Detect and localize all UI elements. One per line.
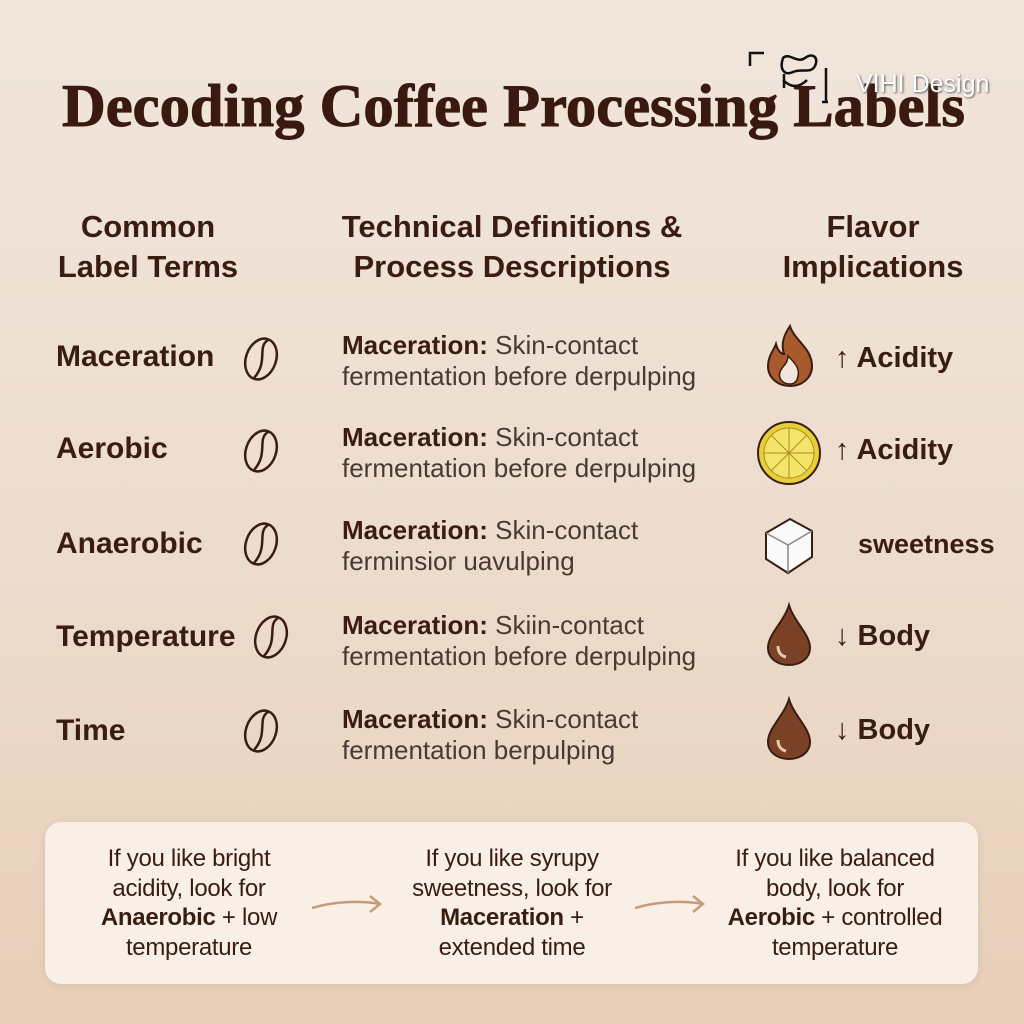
icon: bean — [244, 337, 278, 381]
definition: ferminsior uavulping — [342, 546, 575, 576]
tip: body — [728, 845, 942, 960]
term: Temperature — [56, 620, 236, 653]
icon: drop — [767, 602, 811, 666]
definition — [342, 515, 638, 576]
row: Maceration — [56, 324, 953, 391]
tip: acidity: temperature — [126, 934, 252, 960]
definition: Maceration: Skiin-contact — [342, 610, 644, 640]
logo watermark: VIHI Design — [856, 70, 989, 98]
icon: flame — [767, 324, 813, 387]
tip: body: temperature — [772, 934, 898, 960]
term: Anaerobic — [56, 527, 203, 560]
definition — [342, 704, 638, 765]
definition: Maceration: Skin-contact — [342, 330, 638, 360]
definition — [342, 330, 696, 391]
tip: sweetness: sweetness, look for — [412, 874, 612, 902]
header: definitions — [342, 209, 682, 284]
icon: bean — [244, 709, 278, 753]
tip: body: Aerobic + controlled — [728, 904, 942, 931]
row: Temperature — [56, 602, 930, 671]
tip: body: If you like balanced — [735, 845, 935, 872]
row: Time — [56, 696, 930, 765]
definition: fermentation before derpulping — [342, 641, 696, 671]
definition — [342, 610, 696, 671]
flavor: ↓ Body — [835, 714, 930, 746]
flavor: ↑ Acidity — [835, 342, 953, 374]
flavor: ↓ Body — [835, 620, 930, 652]
term: Time — [56, 714, 125, 747]
tip: acidity: Anaerobic + low — [101, 904, 277, 931]
row: Aerobic — [56, 421, 953, 485]
definition: fermentation berpulping — [342, 735, 615, 765]
flavor: sweetness — [858, 529, 995, 559]
definition — [342, 422, 696, 483]
tip: sweetness — [412, 845, 612, 960]
definition: fermentation before derpulping — [342, 453, 696, 483]
row: Anaerobic — [56, 515, 995, 576]
icon: bean — [254, 615, 288, 659]
term: Aerobic — [56, 432, 168, 465]
definition: Maceration: Skin-contact — [342, 704, 638, 734]
header: definitions: Technical Definitions & — [342, 209, 682, 244]
arrow — [312, 895, 382, 913]
definition: fermentation before derpulping — [342, 361, 696, 391]
header: terms: Common — [81, 209, 215, 244]
header: flavor: Implications — [783, 249, 963, 284]
tip: sweetness: extended time — [439, 934, 585, 960]
tip: sweetness: If you like syrupy — [425, 845, 599, 872]
logo watermark — [748, 52, 990, 104]
tip: acidity — [101, 845, 278, 960]
icon: drop — [767, 696, 811, 760]
header: terms: Label Terms — [58, 249, 238, 284]
definition: Maceration: Skin-contact — [342, 422, 638, 452]
icon: lemon — [757, 421, 821, 485]
title: Decoding Coffee Processing Labels — [62, 73, 965, 139]
arrow — [634, 895, 705, 913]
header: definitions: Process Descriptions — [353, 249, 671, 284]
tip: acidity: If you like bright — [108, 845, 270, 872]
tip: sweetness: Maceration + — [440, 904, 584, 931]
icon: bean — [244, 429, 278, 473]
definition: Maceration: Skin-contact — [342, 515, 638, 545]
tip: body: body, look for — [766, 874, 904, 902]
term: Maceration — [56, 340, 214, 373]
header: terms — [58, 209, 238, 284]
flavor: ↑ Acidity — [835, 434, 953, 466]
icon: bean — [244, 522, 278, 566]
header: flavor: Flavor — [826, 209, 920, 244]
icon: sugar cube — [765, 518, 813, 574]
header: flavor — [783, 209, 963, 284]
panel: recommendations — [45, 822, 978, 984]
tip: acidity: acidity, look for — [112, 874, 266, 902]
